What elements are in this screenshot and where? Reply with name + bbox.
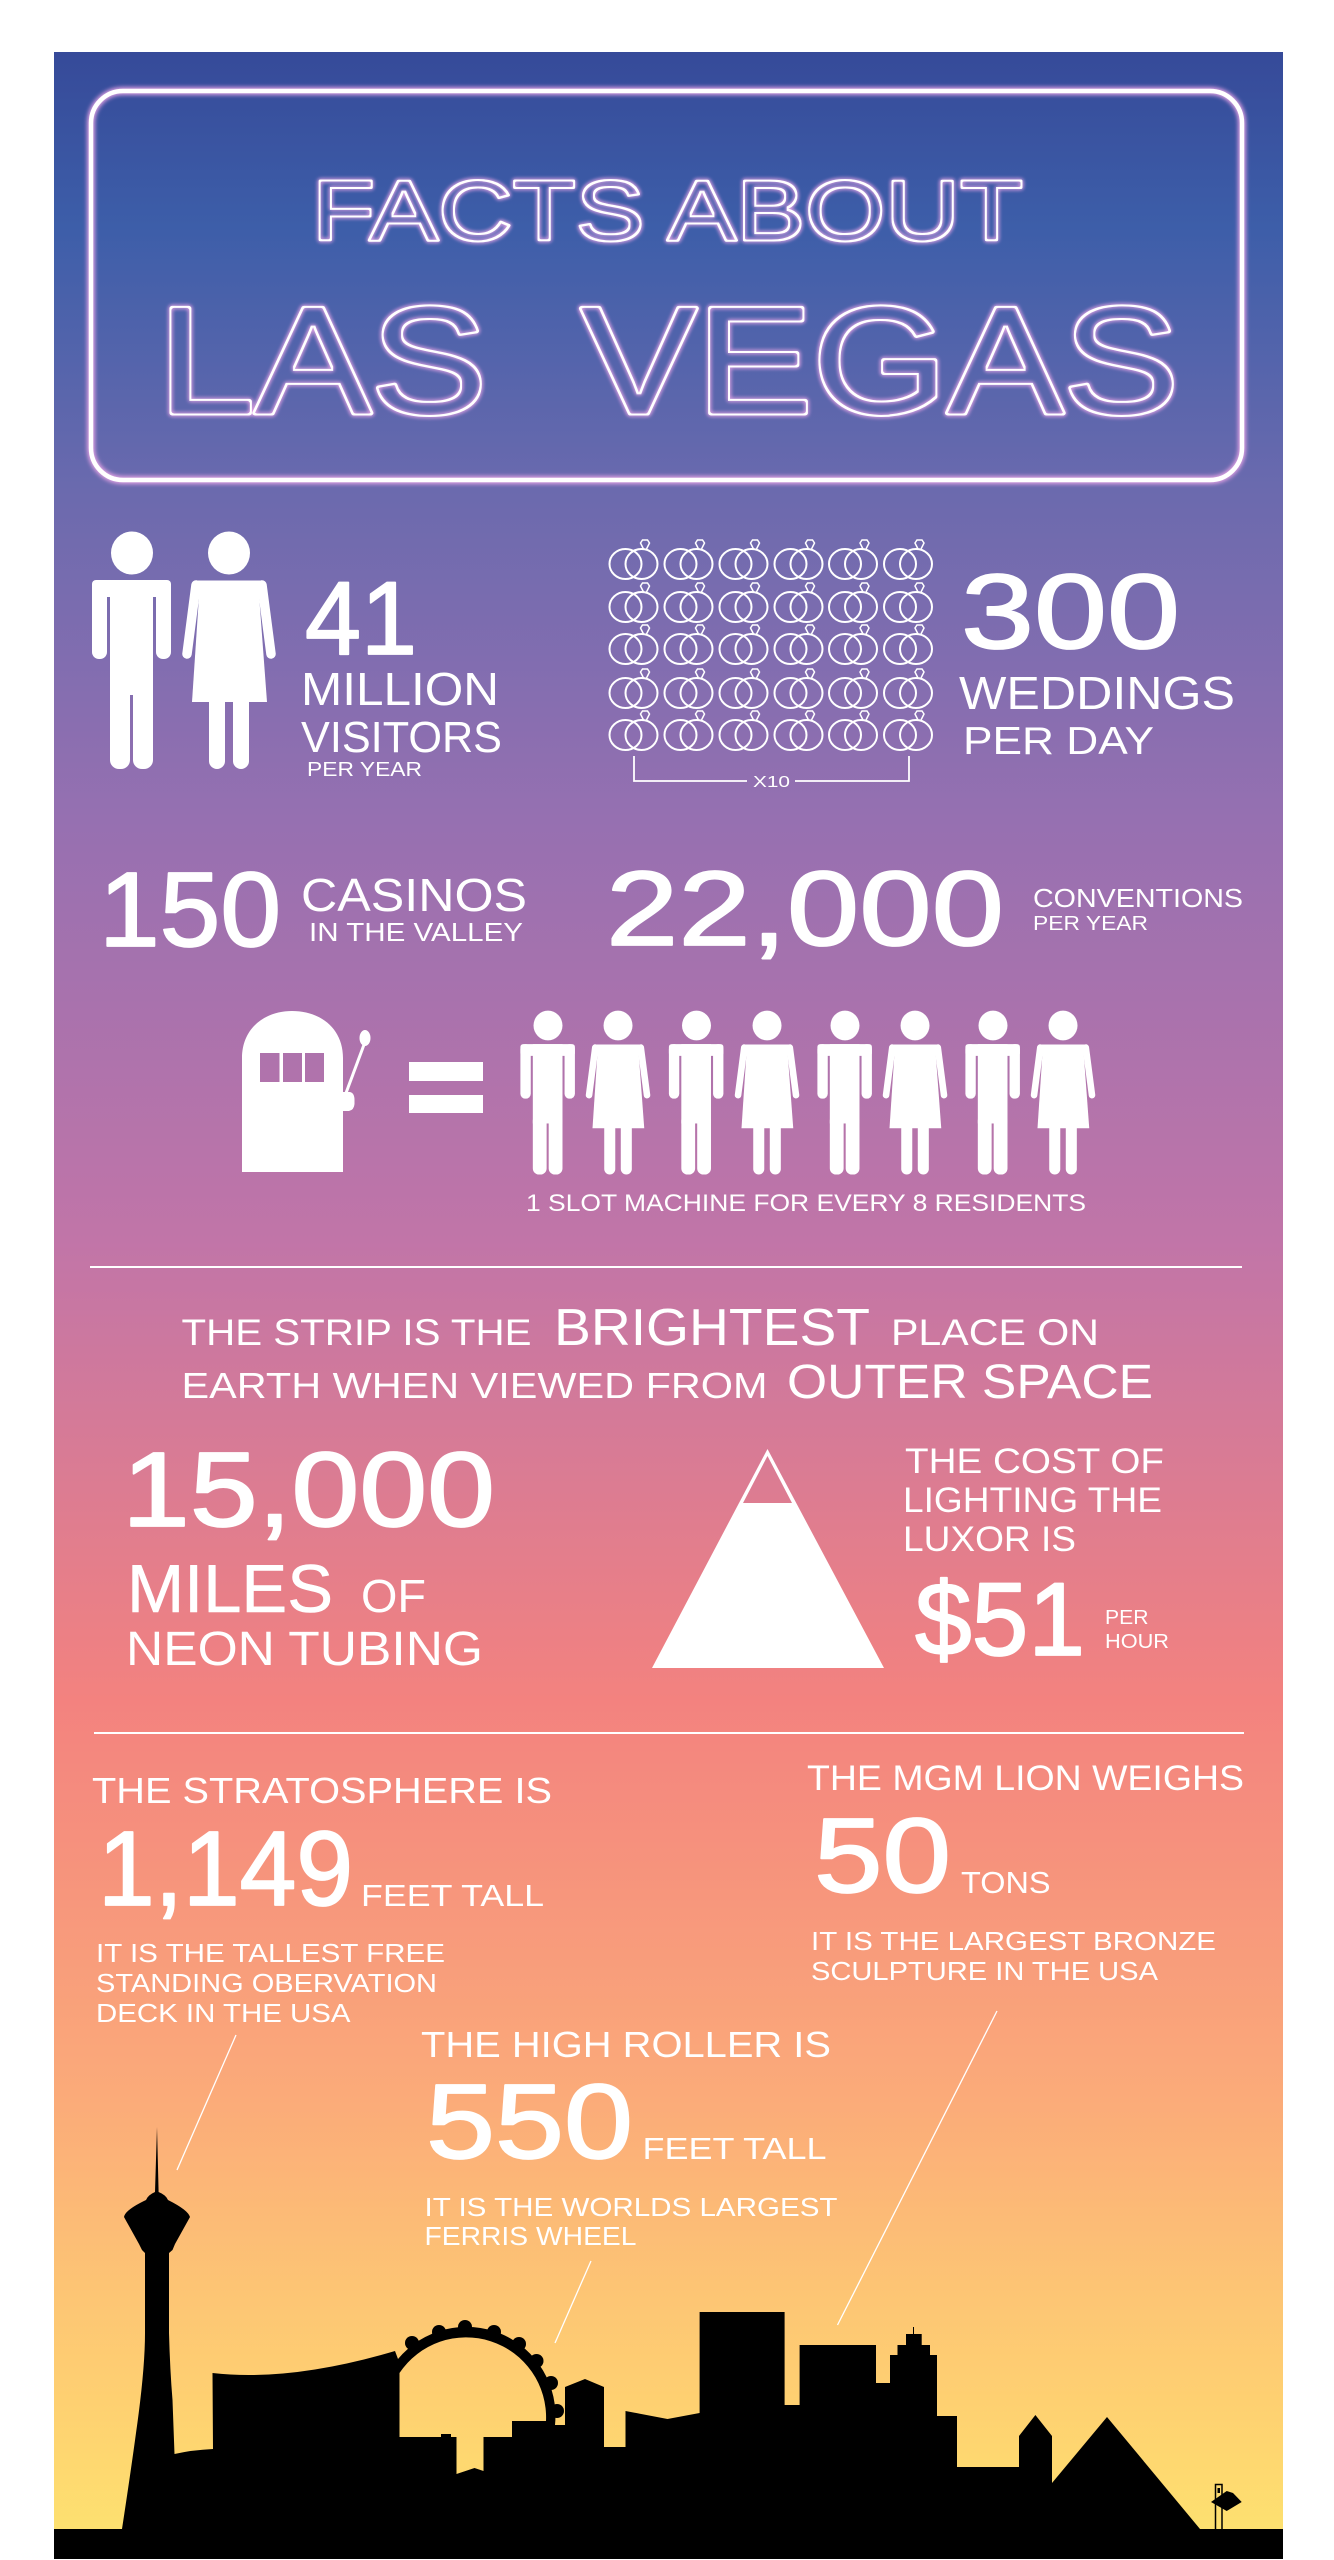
title line: facts about: FACTS ABOUT	[312, 164, 1023, 259]
stratosphere fact: THE STRATOSPHERE IS	[92, 1770, 552, 1811]
stratosphere fact: DECK IN THE USA	[96, 1998, 351, 2028]
stratosphere fact: IT IS THE TALLEST FREE	[96, 1938, 445, 1968]
conventions stat	[606, 850, 1243, 968]
luxor cost stat: THE COST OF	[905, 1442, 1164, 1481]
brightest place text block: EARTH WHEN VIEWED FROM	[182, 1365, 768, 1406]
bracket x10	[634, 756, 909, 791]
per year: PER YEAR	[307, 758, 422, 781]
number 300: 300	[961, 553, 1180, 671]
high roller fact: THE HIGH ROLLER IS	[421, 2024, 831, 2065]
million: MILLION	[301, 663, 499, 715]
pointer: high roller	[555, 2261, 591, 2343]
skyline silhouette	[54, 2127, 1283, 2559]
luxor cost stat: HOUR	[1105, 1630, 1169, 1653]
title line: vegas: VEGAS	[581, 276, 1179, 446]
brightest place text block: OUTER SPACE	[787, 1356, 1153, 1409]
visitors: VISITORS	[301, 713, 502, 762]
luxor cost stat: LUXOR IS	[903, 1520, 1076, 1559]
in the valley: IN THE VALLEY	[309, 917, 523, 947]
icon: welcome sign	[1211, 2484, 1242, 2529]
luxor cost stat: PER	[1105, 1606, 1148, 1629]
conventions: CONVENTIONS	[1033, 883, 1243, 913]
mgm lion fact: IT IS THE LARGEST BRONZE	[811, 1926, 1216, 1956]
visitors stat	[92, 532, 502, 781]
title neon sign	[91, 91, 1242, 480]
per year: PER YEAR	[1033, 912, 1148, 935]
high roller fact: IT IS THE WORLDS LARGEST	[424, 2192, 838, 2222]
icon: slot machine	[242, 1011, 370, 1172]
weddings: WEDDINGS	[959, 667, 1235, 719]
equals sign	[409, 1062, 483, 1113]
brightest place text block: THE STRIP IS THE	[182, 1312, 532, 1353]
slot machine caption: 1 SLOT MACHINE FOR EVERY 8 RESIDENTS	[526, 1190, 1086, 1217]
neon tubing stat	[122, 1431, 495, 1676]
per day: PER DAY	[963, 720, 1154, 763]
icon: woman	[187, 532, 271, 769]
number 41: 41	[305, 561, 417, 677]
high roller fact	[421, 2024, 838, 2251]
neon frame	[91, 91, 1242, 480]
number $51: $51	[915, 1562, 1085, 1678]
high roller fact: FEET TALL	[642, 2131, 826, 2166]
wedding rings grid	[610, 540, 932, 750]
brightest place text block: BRIGHTEST	[554, 1299, 870, 1357]
brightest place text block: PLACE ON	[891, 1312, 1099, 1353]
miles: MILES	[127, 1551, 333, 1627]
neon tubing: NEON TUBING	[126, 1623, 483, 1676]
number 22,000: 22,000	[606, 850, 1004, 968]
title line: las: LAS	[158, 276, 487, 446]
number 1,149: 1,149	[98, 1810, 353, 1928]
stratosphere fact: FEET TALL	[361, 1878, 544, 1913]
luxor cost stat: LIGHTING THE	[903, 1481, 1162, 1520]
weddings stat	[959, 553, 1235, 763]
mgm lion fact: THE MGM LION WEIGHS	[807, 1759, 1244, 1798]
stratosphere fact: STANDING OBERVATION	[96, 1968, 437, 1998]
row of eight residents	[520, 1011, 1092, 1175]
ferris wheel pods	[405, 2320, 564, 2418]
bracket x10: X10	[753, 774, 790, 791]
icon: man	[92, 532, 171, 769]
icon: luxor pyramid	[652, 1449, 884, 1668]
brightest place text block	[182, 1299, 1153, 1409]
casinos stat	[99, 851, 527, 969]
number 50: 50	[814, 1797, 951, 1915]
high roller fact: FERRIS WHEEL	[424, 2221, 636, 2251]
luxor cost stat	[903, 1442, 1169, 1678]
mgm lion fact: TONS	[961, 1865, 1050, 1900]
of: OF	[361, 1570, 426, 1622]
casinos: CASINOS	[301, 869, 527, 921]
number 550: 550	[426, 2063, 633, 2181]
number 15,000: 15,000	[122, 1431, 495, 1549]
pointer: stratosphere	[177, 2035, 236, 2170]
pointer: mgm	[838, 2011, 997, 2325]
mgm lion fact: SCULPTURE IN THE USA	[811, 1956, 1159, 1986]
stratosphere fact	[92, 1770, 552, 2028]
number 150: 150	[99, 851, 281, 969]
mgm lion fact	[807, 1759, 1244, 1986]
